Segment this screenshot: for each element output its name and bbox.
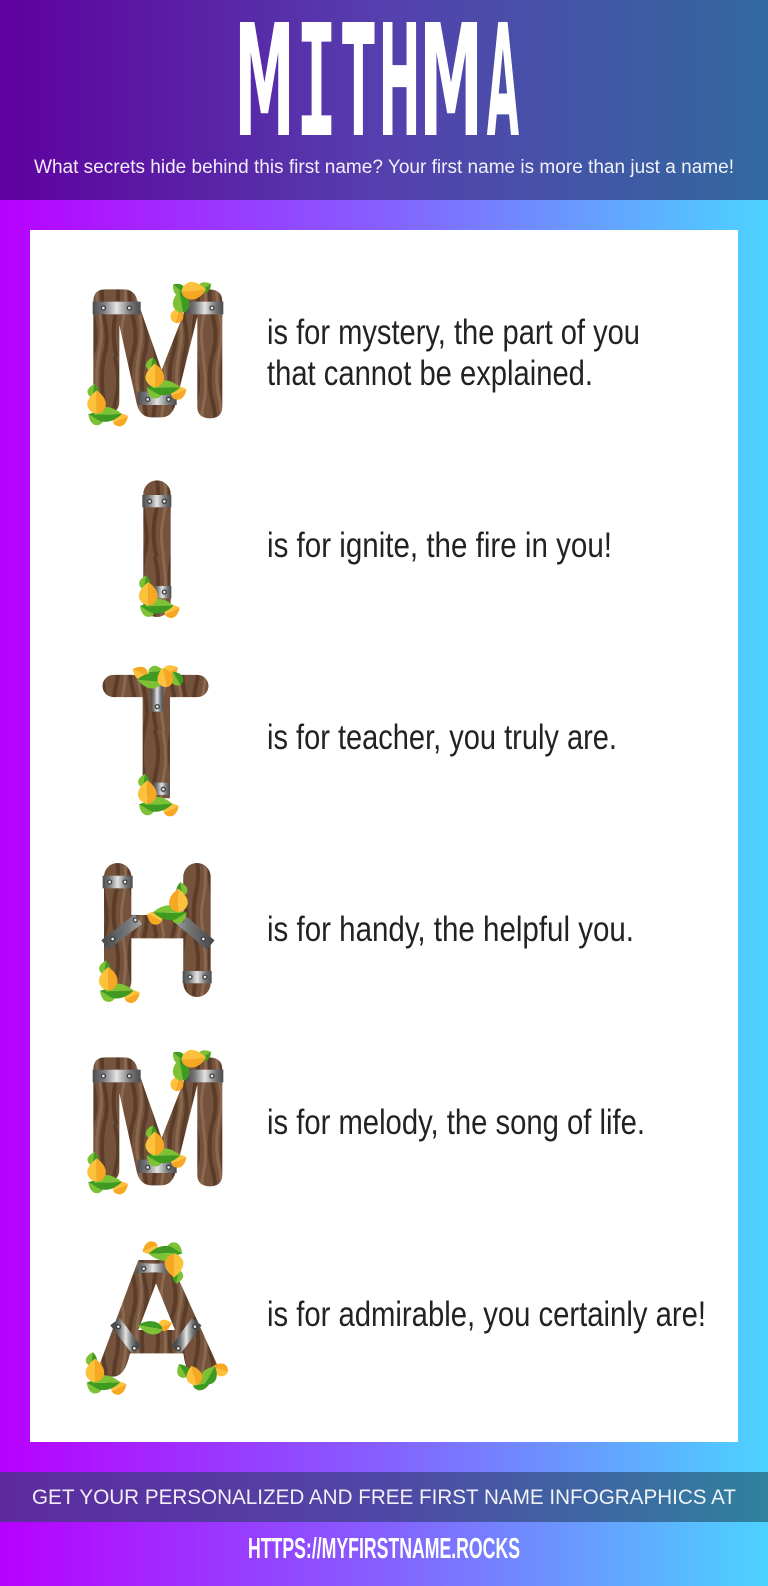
text: M meaning: is for mystery, the part of you [267,313,640,352]
icon: wooden letter H [97,876,212,1005]
text: H meaning: is for handy, the helpful you. [267,910,634,949]
text: T meaning: is for teacher, you truly are. [267,718,617,757]
text: M meaning second line: that cannot be explained. [267,354,593,393]
icon: wooden letter M [85,279,223,429]
icon: wooden letter I [137,494,182,620]
row 6: letter A [84,1239,706,1397]
footer URL: HTTPS://MYFIRSTNAME.ROCKS [248,1533,520,1565]
title: MITHMA [234,0,519,173]
row 3: letter T [114,661,617,819]
icon: wooden letter M [85,1047,223,1197]
row 5: letter M [85,1047,645,1197]
icon: wooden letter A [84,1239,230,1397]
footer call to action: GET YOUR PERSONALIZED AND FREE FIRST NAME INFOGRAPHICS AT [32,1485,736,1509]
row 4: letter H [97,876,634,1005]
row 2: letter I [137,494,612,620]
row 1: letter M [85,279,640,429]
text: I meaning: is for ignite, the fire in you! [267,526,612,565]
panel: white content card [30,230,738,1442]
header band [0,0,768,200]
text: M meaning: is for melody, the song of life. [267,1103,645,1142]
icon: wooden letter T [114,661,197,819]
footer band [0,1472,768,1522]
subtitle: What secrets hide behind this first name? Your first name is more than just a name! [34,156,734,178]
